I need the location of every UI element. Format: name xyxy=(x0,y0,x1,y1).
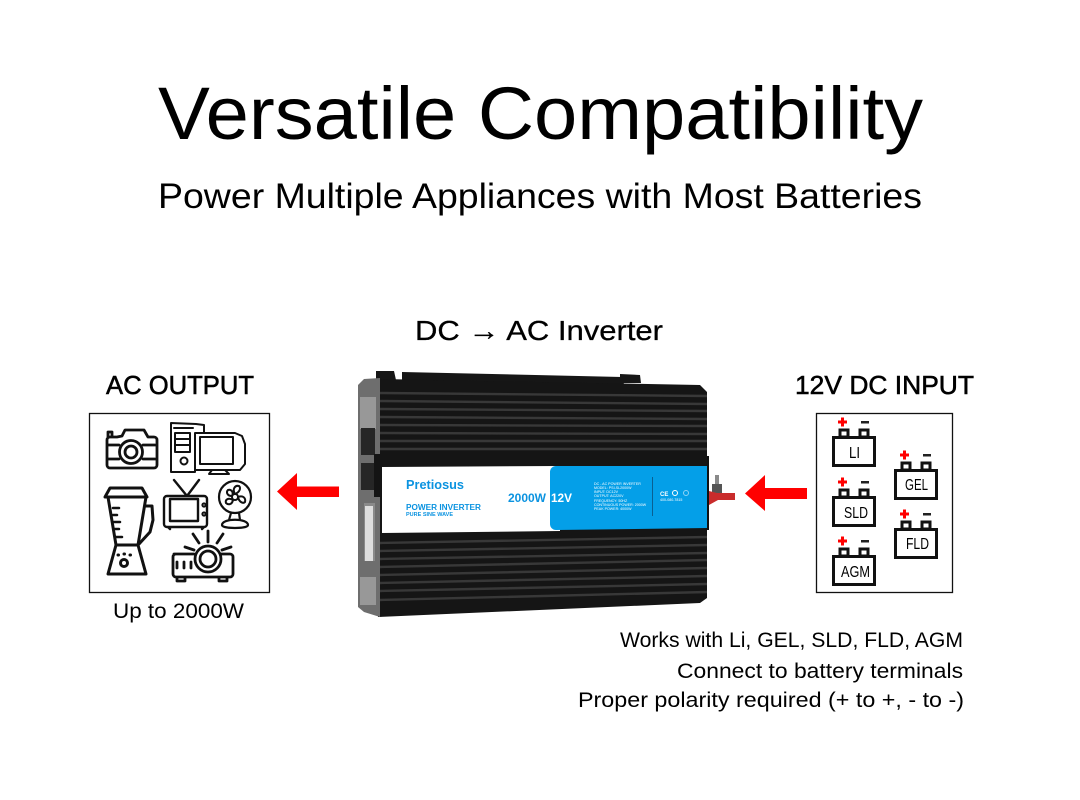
panel: AC appliances xyxy=(90,414,270,592)
specifications: OUTPUT: AC220V xyxy=(594,494,624,498)
AC output heading: AC OUTPUT xyxy=(106,370,254,400)
DC input heading: 12V DC INPUT xyxy=(795,370,974,400)
product subtitle: PURE SINE WAVE xyxy=(406,512,454,518)
top mounting tabs xyxy=(376,371,641,384)
battery: LI xyxy=(834,418,874,466)
certification marks: CE xyxy=(660,492,668,498)
title: Versatile Compatibility xyxy=(158,72,923,155)
panel: batteries xyxy=(816,414,952,592)
battery notes: Proper polarity required (+ to +, - to -) xyxy=(578,689,964,712)
icon: blender xyxy=(105,488,153,574)
certification marks xyxy=(660,490,688,502)
battery: FLD xyxy=(896,510,936,558)
specifications: MODEL: PSI-SL2000W xyxy=(594,486,632,490)
inverter product image xyxy=(358,371,735,617)
specifications xyxy=(594,482,647,511)
black finned body xyxy=(378,379,707,617)
battery terminal xyxy=(707,456,735,530)
icon: television xyxy=(164,480,207,529)
battery: SLD: SLD xyxy=(844,505,868,522)
specifications: DC - AC POWER INVERTER xyxy=(594,482,641,486)
arrow: output xyxy=(277,473,339,510)
side panel xyxy=(358,378,380,617)
battery: GEL xyxy=(896,450,936,498)
AC output caption: Up to 2000W xyxy=(113,600,244,623)
inverter heading: DC → AC Inverter xyxy=(415,315,663,346)
heat-sink fins top xyxy=(380,393,707,600)
label divider xyxy=(652,477,654,516)
battery: LI: LI xyxy=(849,445,860,462)
voltage: 12V xyxy=(551,491,572,505)
product name: POWER INVERTER xyxy=(406,503,481,512)
brand name: Pretiosus xyxy=(406,477,464,492)
battery: GEL: GEL xyxy=(905,477,928,494)
subtitle: Power Multiple Appliances with Most Batteries xyxy=(158,177,922,216)
battery: AGM xyxy=(834,536,874,584)
specifications: INPUT: DC12V xyxy=(594,490,619,494)
icon: projector xyxy=(173,531,233,581)
battery notes xyxy=(578,629,964,712)
battery notes: Connect to battery terminals xyxy=(677,660,963,683)
specifications: CONTINUOUS POWER: 2000W xyxy=(594,503,647,507)
icon: desktop computer xyxy=(171,423,245,474)
icon: camera xyxy=(107,430,157,468)
side display xyxy=(364,503,375,561)
arrow: input xyxy=(745,475,807,511)
battery: FLD: FLD xyxy=(906,536,929,553)
battery notes: Works with Li, GEL, SLD, FLD, AGM xyxy=(620,629,963,652)
specifications: FREQUENCY: 50HZ xyxy=(594,499,628,503)
AC sockets xyxy=(361,428,375,490)
icon: desk fan xyxy=(219,481,251,528)
white label xyxy=(382,466,560,533)
blue label xyxy=(550,466,707,530)
certification marks: 400-080-7815 xyxy=(660,498,682,502)
battery: SLD xyxy=(834,478,874,526)
wattage: 2000W xyxy=(508,491,547,505)
specifications: PEAK POWER: 4000W xyxy=(594,507,632,511)
battery: AGM: AGM xyxy=(841,564,870,581)
